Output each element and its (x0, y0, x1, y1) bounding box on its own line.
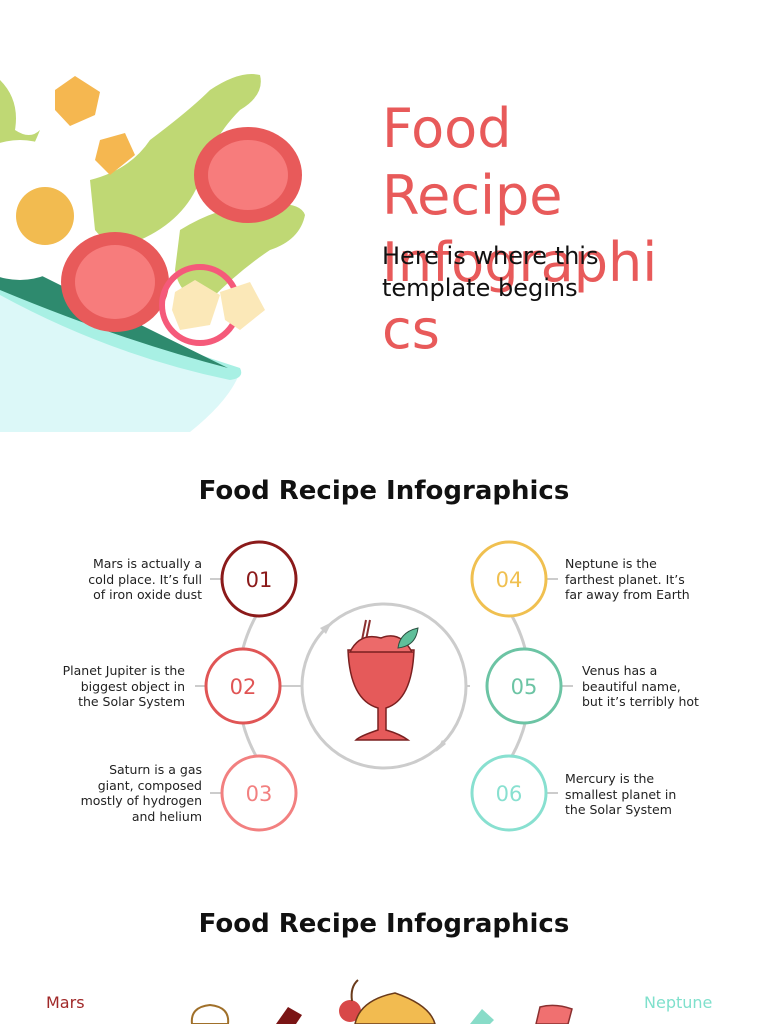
diagram: steps cycle (63, 540, 699, 832)
illustration: salad bowl (0, 74, 305, 432)
label: Neptune: Neptune (644, 993, 712, 1012)
label: Mars: Mars (46, 993, 85, 1012)
text: step 05: beautiful name, (582, 678, 681, 694)
diagram: steps cycle: 02 (230, 675, 256, 699)
title (382, 97, 657, 361)
icons: food row (190, 979, 573, 1024)
diagram: steps cycle: 04 (496, 568, 522, 592)
diagram: steps cycle: 03 (246, 782, 272, 806)
text: step 05: Venus has a (582, 663, 657, 678)
text: step 01: Mars is actually a cold place. It’s full of iron oxide dust (88, 556, 202, 602)
diagram: steps cycle: 06 (496, 782, 522, 806)
subtitle: Here is where this template begins (382, 242, 598, 302)
diagram: steps cycle: 05 (511, 675, 537, 699)
title: Food (382, 97, 512, 160)
text: step 02: Planet Jupiter is the biggest object in the Solar System (63, 663, 185, 709)
text: step 03: Saturn is a gas giant, composed mostly of hydrogen and helium (81, 762, 202, 824)
title: Recipe (382, 164, 563, 227)
diagram: steps cycle: 01 (246, 568, 272, 592)
text: step 05: but it’s terribly hot (582, 694, 699, 709)
text: step 06: Mercury is the smallest planet in the Solar System (565, 771, 676, 817)
heading 1: Food Recipe Infographics (199, 476, 569, 506)
text: step 05 (582, 663, 699, 709)
heading 2: Food Recipe Infographics (199, 909, 569, 939)
title: Infographi (382, 231, 657, 294)
text: step 04: Neptune is the farthest planet. It’s far away from Earth (565, 556, 690, 602)
title: cs (382, 298, 440, 361)
icon: drink glass (348, 620, 418, 740)
